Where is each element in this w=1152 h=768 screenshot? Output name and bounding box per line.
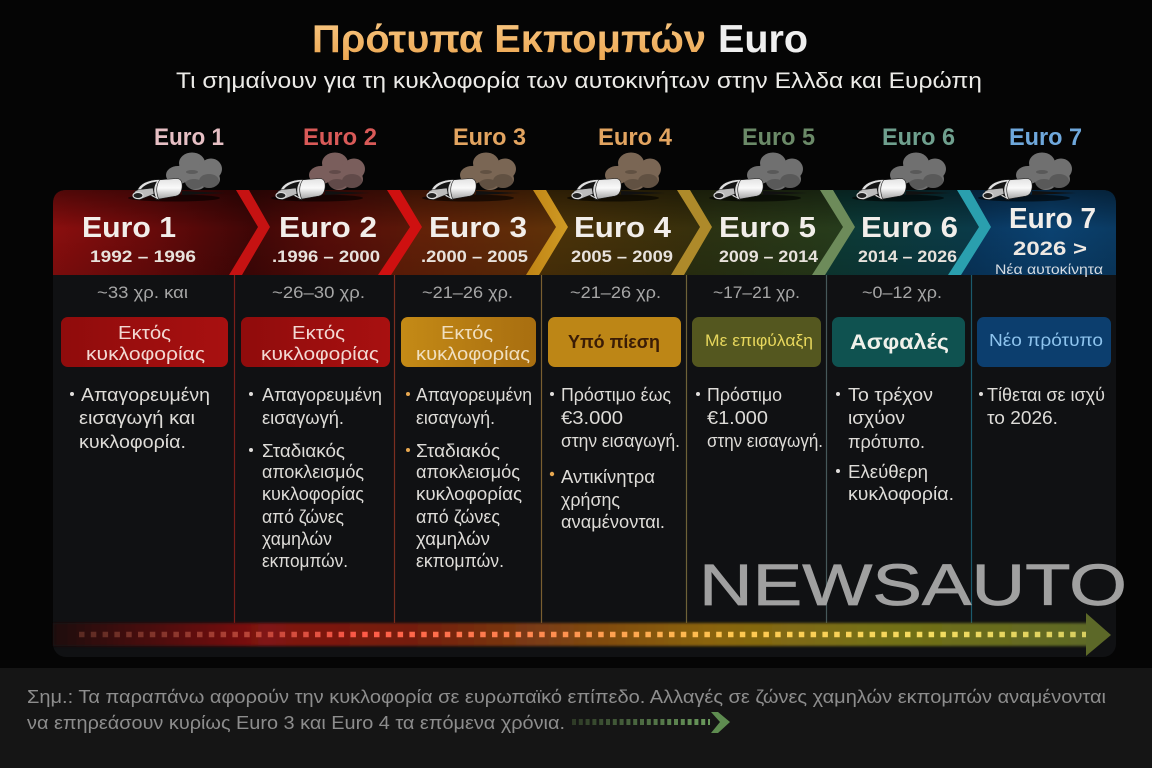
- band segment: Euro 5: [677, 190, 849, 275]
- header text: 2026 >: [1013, 239, 1087, 260]
- bullets: Απαγορευμένη: [262, 385, 382, 405]
- header text: Νέα αυτοκίνητα: [995, 262, 1103, 277]
- status pill: κυκλοφορίας: [416, 344, 530, 364]
- bullets: πρότυπο.: [848, 432, 925, 452]
- bullets: εισαγωγή και: [79, 408, 195, 428]
- label: Euro 6: Euro 6: [882, 124, 955, 151]
- label: Euro 3: Euro 3: [453, 124, 526, 151]
- chevron: Euro 3 to 4: [526, 190, 568, 275]
- band segment: Euro 2: [235, 190, 416, 275]
- column: Euro 3: [401, 212, 536, 571]
- icon: exhaust Euro 1: [128, 152, 226, 202]
- status pill: Εκτός: [118, 323, 171, 343]
- header text: [719, 212, 819, 266]
- icon: exhaust Euro 6: [852, 152, 950, 202]
- bullets: Απαγορευμένη: [81, 385, 210, 405]
- bullets: [70, 385, 210, 452]
- subtitle: Τι σημαίνουν για τη κυκλοφορία των αυτοκινήτων στην Ελλδα και Ευρώπη: [176, 68, 982, 93]
- header text: Euro 2: [279, 212, 377, 244]
- bullets: [249, 385, 382, 571]
- column: Euro 4: [548, 212, 681, 532]
- bullets: εκπομπών.: [262, 551, 348, 571]
- bullets: αναμένονται.: [561, 512, 665, 532]
- column: Euro 5: [692, 212, 823, 451]
- bullets: Σταδιακός: [416, 441, 500, 461]
- status pill: [401, 317, 536, 367]
- watermark: NEWSAUTO: [699, 553, 1127, 618]
- label: Euro 4: Euro 4: [598, 124, 673, 151]
- header text: Euro 1: [82, 212, 176, 244]
- age: ~0–12 χρ.: [862, 284, 942, 302]
- bullets: Τίθεται σε ισχύ: [987, 385, 1105, 405]
- header text: 2005 – 2009: [571, 247, 673, 266]
- bullets: χρήσης: [561, 490, 620, 510]
- label: Euro 5: Euro 5: [742, 124, 815, 151]
- chevron: Euro 5 to 6: [812, 190, 855, 275]
- status pill: [692, 317, 821, 367]
- bullets: το 2026.: [987, 408, 1058, 428]
- header text: [571, 212, 673, 266]
- band segment: Euro 1: [53, 190, 264, 275]
- bullets: κυκλοφορία.: [79, 432, 186, 452]
- top labels: [154, 124, 1082, 151]
- status pill: [977, 317, 1111, 367]
- bullets: Σταδιακός: [262, 441, 345, 461]
- header text: [272, 212, 380, 266]
- bullets: εκπομπών.: [416, 551, 504, 571]
- status pill: [61, 317, 228, 367]
- chevron: Euro 4 to 5: [671, 190, 712, 275]
- header text: Euro 3: [429, 212, 527, 244]
- label: Euro 1: Euro 1: [154, 124, 224, 151]
- header text: .2000 – 2005: [421, 247, 528, 266]
- bullets: χαμηλών: [262, 529, 332, 549]
- footnote text: Σημ.: Τα παραπάνω αφορούν την κυκλοφορία σε ευρωπαϊκό επίπεδο. Αλλαγές σε ζώνες χαμηλών εκπομπών αναμένονται: [27, 686, 1106, 707]
- status pill: Εκτός: [441, 323, 493, 343]
- bullets: €1.000: [707, 408, 768, 428]
- bullets: [979, 385, 1105, 428]
- band segment: Euro 4: [532, 190, 706, 275]
- bullets: στην εισαγωγή.: [707, 431, 823, 451]
- icon: exhaust Euro 4: [567, 152, 665, 202]
- age: ~26–30 χρ.: [272, 284, 365, 302]
- title: Euro: [718, 18, 808, 61]
- band segment: Euro 3: [384, 190, 562, 275]
- status pill: κυκλοφορίας: [261, 344, 379, 364]
- footnote arrow: [572, 712, 730, 733]
- bullets: στην εισαγωγή.: [561, 431, 680, 451]
- bullets: [696, 385, 823, 451]
- bullets: [550, 385, 680, 532]
- footer band: [0, 668, 1152, 768]
- bullets: Ελεύθερη: [848, 462, 928, 482]
- chevron: Euro 6 to 7: [948, 190, 991, 275]
- band segment: Euro 6: [818, 190, 985, 275]
- header text: [421, 212, 528, 266]
- header text: .1996 – 2000: [272, 247, 380, 266]
- bullets: Πρόστιμο έως: [561, 385, 671, 405]
- header text: Euro 5: [719, 212, 816, 244]
- title: Πρότυπα Εκπομπών: [312, 18, 706, 61]
- bullets: κυκλοφορίας: [262, 484, 364, 504]
- status pill: κυκλοφορίας: [86, 344, 205, 364]
- label: Euro 7: Euro 7: [1009, 124, 1082, 151]
- column: Euro 7: [977, 203, 1111, 428]
- progress arrow: [53, 613, 1111, 656]
- bullets: Απαγορευμένη: [416, 385, 532, 405]
- header text: 1992 – 1996: [90, 247, 196, 266]
- icon: exhaust Euro 5: [709, 152, 807, 202]
- bullets: αποκλεισμός: [262, 462, 364, 482]
- bullets: από ζώνες: [416, 507, 500, 527]
- icon: exhaust Euro 7: [978, 152, 1076, 202]
- status pill: [548, 317, 681, 367]
- header text: Euro 4: [574, 212, 671, 244]
- label: Euro 2: Euro 2: [303, 124, 377, 151]
- bullets: €3.000: [561, 408, 623, 428]
- status pill: [241, 317, 390, 367]
- bullets: Πρόστιμο: [707, 385, 782, 405]
- header text: [858, 212, 958, 266]
- bullets: από ζώνες: [262, 507, 344, 527]
- header text: Euro 6: [861, 212, 958, 244]
- header text: 2014 – 2026: [858, 247, 957, 266]
- status pill: Με επιφύλαξη: [705, 332, 813, 350]
- status pill: Ασφαλές: [850, 331, 949, 354]
- bullets: ισχύον: [848, 408, 905, 428]
- footnote text: [27, 686, 1106, 733]
- column: Euro 1: [61, 212, 228, 452]
- status pill: Υπό πίεση: [568, 331, 660, 352]
- icon: exhaust Euro 3: [422, 152, 520, 202]
- bullets: αποκλεισμός: [416, 462, 520, 482]
- column: Euro 2: [241, 212, 390, 571]
- bullets: [406, 385, 532, 571]
- bullets: κυκλοφορία.: [848, 484, 954, 504]
- status pill: Εκτός: [292, 323, 345, 343]
- age: ~17–21 χρ.: [713, 284, 800, 302]
- header text: [995, 203, 1103, 277]
- band segment: Euro 7: [954, 190, 1116, 275]
- bullets: κυκλοφορίας: [416, 484, 522, 504]
- bullets: [836, 385, 954, 504]
- status pill: [832, 317, 965, 367]
- bullets: εισαγωγή.: [416, 408, 495, 428]
- status pill: Νέο πρότυπο: [989, 330, 1103, 350]
- column: Euro 6: [832, 212, 965, 504]
- icons: exhaust mufflers with smoke: [128, 152, 1076, 202]
- bullets: εισαγωγή.: [262, 408, 344, 428]
- age: ~33 χρ. και: [97, 284, 188, 302]
- icon: exhaust Euro 2: [271, 152, 369, 202]
- chevron: Euro 1 to 2: [229, 190, 270, 275]
- header text: Euro 7: [1009, 203, 1096, 235]
- header band: timeline chevrons: [53, 190, 1116, 275]
- bullets: χαμηλών: [416, 529, 490, 549]
- header text: [82, 212, 196, 266]
- header text: 2009 – 2014: [719, 247, 819, 266]
- age: ~21–26 χρ.: [570, 284, 661, 302]
- panel: table background: [53, 190, 1116, 657]
- bullets: Το τρέχον: [848, 385, 933, 405]
- chevron: Euro 2 to 3: [378, 190, 422, 275]
- band top shading: [53, 190, 1116, 275]
- column dividers: [234, 275, 972, 623]
- footnote text: να επηρεάσουν κυρίως Euro 3 και Euro 4 τα επόμενα χρόνια.: [27, 712, 565, 733]
- bullets: Αντικίνητρα: [561, 467, 655, 487]
- age: ~21–26 χρ.: [422, 284, 513, 302]
